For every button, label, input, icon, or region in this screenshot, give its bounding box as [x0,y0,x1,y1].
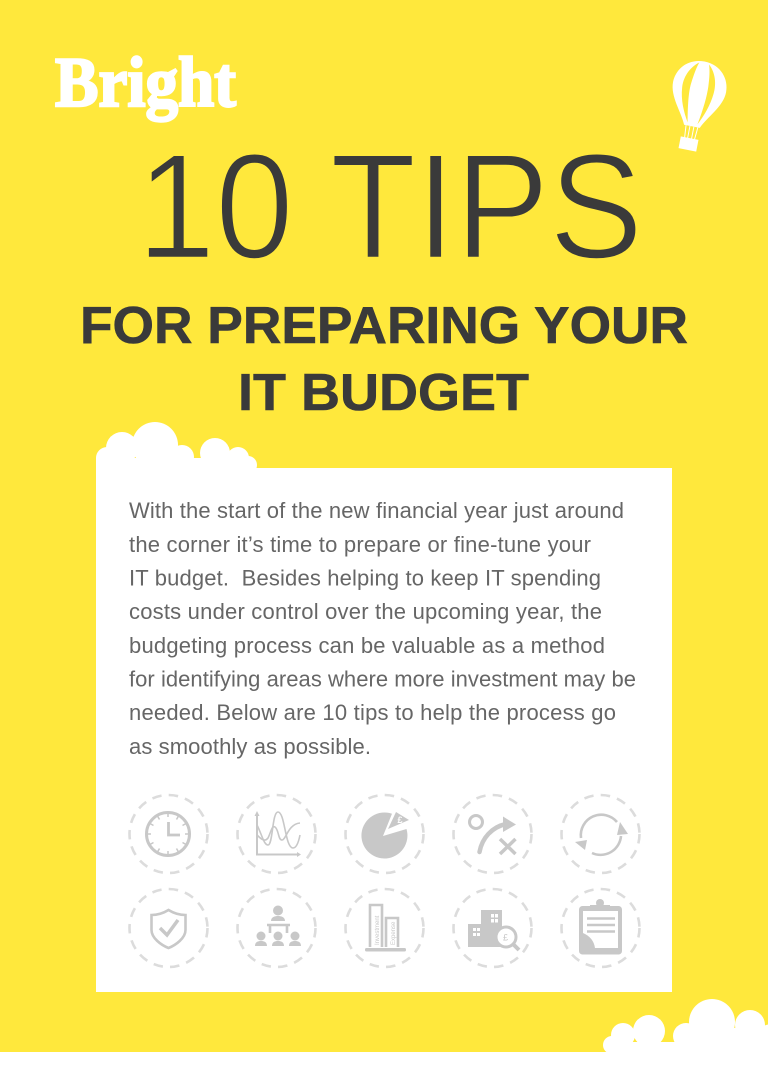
subtitle [80,297,688,422]
icon: hot air balloon [661,56,731,155]
icon: buildings and magnifier [454,889,532,967]
icon: refresh arrows [562,795,640,873]
intro paragraph: needed. Below are 10 tips to help the process go [129,700,616,725]
icon: budget bars: Investment [375,915,381,945]
intro paragraph: IT budget. Besides helping to keep IT spending [129,566,601,590]
intro paragraph: as smoothly as possible. [129,734,371,759]
intro paragraph [129,498,636,759]
icon: clock [130,795,208,873]
intro paragraph: With the start of the new financial year just around [129,498,624,523]
icon: pie chart with pound tag [346,795,424,873]
intro paragraph: budgeting process can be valuable as a method [129,633,605,658]
icon: pie chart with pound tag: £ [398,815,403,825]
icon: budget bars: Expense [391,921,397,945]
cloud: bottom right [603,999,768,1060]
title: 10 TIPS: 10 TIPS [137,122,643,290]
intro paragraph: the corner it’s time to prepare or fine-tune your [129,532,591,557]
logo: Bright: Bright [55,44,236,122]
icon: clipboard [562,889,640,967]
subtitle: FOR PREPARING YOUR [80,297,688,355]
icon: buildings and magnifier: £ [503,932,508,942]
panel: intro card [96,468,672,992]
icon: budget bars [346,889,424,967]
subtitle: IT BUDGET [238,364,529,422]
intro paragraph: costs under control over the upcoming year, the [129,599,602,624]
cloud: top left [96,422,257,474]
icon: team meeting [238,889,316,967]
icon: line chart [238,795,316,873]
bottom white strip [0,1052,768,1087]
icon: strategy arrow [454,795,532,873]
icon: shield with check [130,889,208,967]
intro paragraph: for identifying areas where more investment may be [129,666,636,692]
